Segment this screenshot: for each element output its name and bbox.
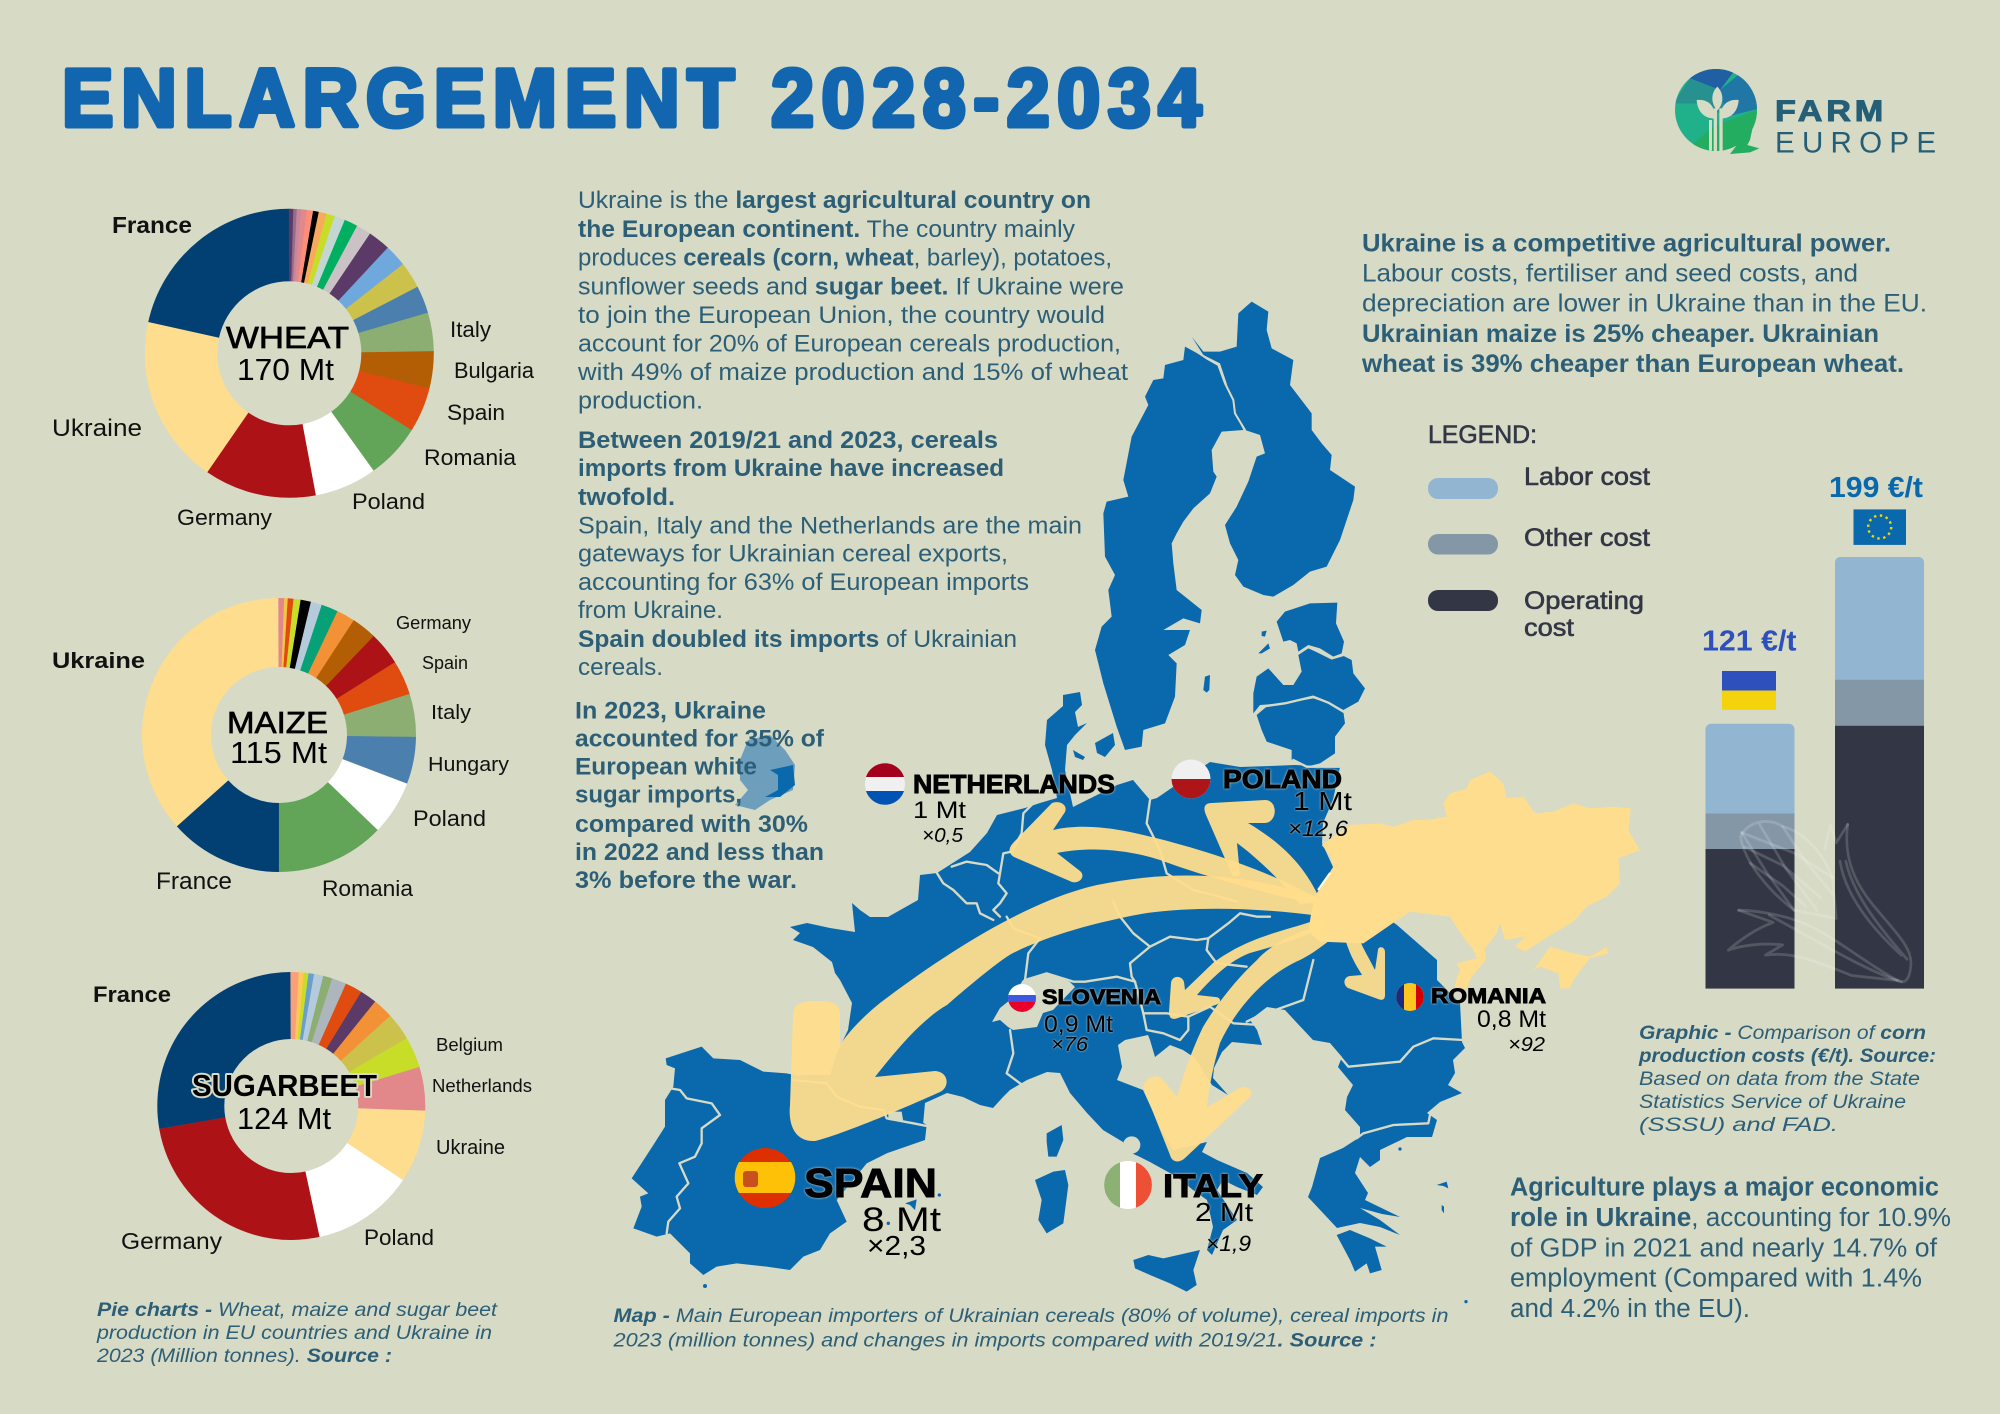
map: Iberia bbox=[632, 1047, 1068, 1288]
wheat country labels: Bulgaria bbox=[454, 358, 535, 383]
sugarbeet center label: 124 Mt bbox=[237, 1101, 331, 1136]
legend: operating cost: cost bbox=[1524, 614, 1574, 642]
text: economic role paragraph: role in Ukraine, accounting for 10.9% bbox=[1510, 1204, 1951, 1232]
arrow: to Romania bbox=[1344, 942, 1385, 1000]
text: imports paragraph: twofold. bbox=[578, 484, 675, 511]
label: Romania: 0,8 Mt bbox=[1477, 1006, 1546, 1033]
map: Ukraine bbox=[1308, 772, 1640, 992]
label: Slovenia: 0,9 Mt bbox=[1044, 1011, 1113, 1038]
arrow: to Slovenia bbox=[1169, 918, 1328, 1019]
text: competitive power paragraph: wheat is 39% cheaper than European wheat. bbox=[1361, 350, 1904, 378]
text: intro paragraph: the European continent. The country mainly bbox=[578, 216, 1075, 243]
title: ENLARGEMENT 2028-2034 bbox=[62, 52, 1201, 144]
text: imports paragraph: Spain doubled its imports of Ukrainian bbox=[578, 626, 1017, 653]
maize country labels: Hungary bbox=[428, 754, 509, 776]
label: Romania bbox=[1396, 983, 1546, 1056]
legend: LEGEND: bbox=[1428, 421, 1537, 449]
caption: pie charts bbox=[96, 1300, 498, 1367]
text: sugar paragraph: In 2023, Ukraine bbox=[575, 698, 766, 724]
label: Poland: POLAND bbox=[1223, 764, 1342, 794]
value: Ukraine: 121 €/t bbox=[1702, 626, 1797, 658]
flag: Netherlands bbox=[865, 763, 905, 805]
text: economic role paragraph bbox=[1510, 1174, 1951, 1323]
maize country labels: Spain bbox=[422, 653, 468, 673]
text: sugar paragraph: accounted for 35% of bbox=[575, 726, 825, 752]
sugarbeet country labels: Belgium bbox=[436, 1035, 503, 1055]
maize country labels: France bbox=[156, 868, 232, 895]
map: internal borders bbox=[937, 800, 1270, 1087]
legend: other cost: Other cost bbox=[1524, 524, 1650, 552]
label: Romania: ×92 bbox=[1508, 1034, 1545, 1056]
text: sugar paragraph: 3% before the war. bbox=[575, 867, 797, 894]
text: imports paragraph: accounting for 63% of European imports bbox=[578, 569, 1029, 596]
sugarbeet country labels: Ukraine bbox=[436, 1137, 505, 1159]
arrow: to Netherlands bbox=[1010, 802, 1320, 905]
maize country labels: Poland bbox=[413, 806, 486, 831]
label: Italy bbox=[1104, 1161, 1263, 1256]
text: intro paragraph: Ukraine is the largest agricultural country on bbox=[578, 187, 1091, 214]
wheat country labels: Spain bbox=[447, 400, 505, 425]
map: mainland EU bbox=[790, 692, 1465, 1255]
flag: Romania bbox=[1396, 983, 1424, 1011]
flag: Poland bbox=[1172, 760, 1210, 798]
text: economic role paragraph: employment (Compared with 1.4% bbox=[1510, 1264, 1922, 1292]
legend: labor cost: Labor cost bbox=[1524, 463, 1650, 491]
sugarbeet country labels: Germany bbox=[121, 1228, 223, 1254]
label: Netherlands bbox=[865, 763, 1115, 847]
label: Slovenia bbox=[1008, 984, 1161, 1056]
caption: graphic: (SSSU) and FAD. bbox=[1639, 1115, 1838, 1136]
label: Spain: SPAIN bbox=[804, 1160, 937, 1206]
label: Spain: 8 Mt bbox=[862, 1201, 942, 1239]
label: Poland bbox=[1172, 760, 1353, 841]
text: economic role paragraph: of GDP in 2021 and nearly 14.7% of bbox=[1510, 1234, 1938, 1262]
label: Netherlands: NETHERLANDS bbox=[913, 769, 1115, 799]
label: Italy: 2 Mt bbox=[1195, 1197, 1254, 1227]
text: competitive power paragraph bbox=[1361, 230, 1927, 378]
label: Spain bbox=[735, 1148, 942, 1261]
sugarbeet center label bbox=[192, 1068, 377, 1136]
sugarbeet center label: SUGARBEET bbox=[192, 1068, 377, 1103]
label: Poland: 1 Mt bbox=[1293, 786, 1353, 816]
label: Netherlands: ×0,5 bbox=[922, 825, 964, 847]
maize country labels: Ukraine bbox=[52, 648, 145, 673]
map: Balearic islands, Corsica, Sardinia bbox=[703, 1125, 1068, 1288]
logo text: EUROPE bbox=[1775, 127, 1943, 160]
caption: pie charts: Pie charts - Wheat, maize and sugar beet bbox=[97, 1300, 498, 1321]
wheat country labels: France bbox=[112, 212, 192, 238]
map: Switzerland gap bbox=[992, 973, 1075, 1030]
map: Danish islands bbox=[1073, 733, 1115, 760]
label: Romania: ROMANIA bbox=[1431, 985, 1546, 1008]
map: Sweden, Finland, Baltics bbox=[1095, 302, 1365, 767]
text: competitive power paragraph: depreciation are lower in Ukraine than in the EU. bbox=[1362, 290, 1927, 318]
bar: Ukraine bbox=[1706, 724, 1794, 989]
caption: map: 2023 (million tonnes) and changes in imports compared with 2019/21 . Source : bbox=[612, 1330, 1376, 1352]
arrow: to Poland bbox=[1204, 800, 1320, 905]
arrows from Ukraine bbox=[790, 800, 1385, 1161]
text: intro paragraph: production. bbox=[578, 388, 703, 414]
chart: sugarbeet segments bbox=[191, 1006, 392, 1206]
text: economic role paragraph: and 4.2% in the EU). bbox=[1510, 1295, 1750, 1323]
sugarbeet country labels: Netherlands bbox=[432, 1076, 532, 1096]
text: sugar paragraph: compared with 30% bbox=[575, 811, 808, 838]
maize center label bbox=[227, 705, 328, 770]
caption: map: Map - Main European importers of Ukrainian cereals (80% of volume), cereal imports in bbox=[614, 1306, 1448, 1327]
label: Slovenia: SLOVENIA bbox=[1042, 986, 1161, 1009]
text: competitive power paragraph: Ukrainian maize is 25% cheaper. Ukrainian bbox=[1362, 320, 1879, 348]
panel: wheat donut chart bbox=[52, 212, 535, 530]
logo: Farm Europe bbox=[1675, 69, 1935, 154]
caption: graphic: Graphic - Comparison of corn bbox=[1639, 1023, 1926, 1044]
text: sugar paragraph: in 2022 and less than bbox=[575, 839, 824, 866]
text: intro paragraph: account for 20% of European cereals production, bbox=[578, 330, 1121, 358]
flag: Spain bbox=[735, 1148, 795, 1208]
maize center label: 115 Mt bbox=[230, 735, 327, 770]
text: intro paragraph: produces cereals (corn, wheat, barley), potatoes, bbox=[578, 244, 1112, 272]
sugarbeet country labels bbox=[93, 982, 532, 1254]
text: sugar paragraph bbox=[575, 698, 825, 894]
chart: wheat segments bbox=[181, 245, 398, 462]
text: intro paragraph: sunflower seeds and sugar beet. If Ukraine were bbox=[578, 274, 1124, 300]
label: Slovenia: ×76 bbox=[1051, 1034, 1089, 1056]
flag: EU bbox=[1854, 509, 1906, 545]
caption: graphic bbox=[1638, 1023, 1936, 1136]
map: Sicily, Peloponnese, islands bbox=[1123, 1136, 1468, 1303]
label: Italy: ITALY bbox=[1163, 1168, 1263, 1204]
text: economic role paragraph: Agriculture plays a major economic bbox=[1510, 1174, 1939, 1202]
icon: plant bbox=[1697, 87, 1739, 152]
wheat country labels: Ukraine bbox=[52, 415, 142, 442]
label: Netherlands: 1 Mt bbox=[913, 797, 966, 824]
logo text: FARM bbox=[1775, 95, 1887, 128]
maize country labels bbox=[52, 613, 509, 901]
icon: corn outline bbox=[1728, 821, 1911, 982]
wheat center label: WHEAT bbox=[226, 320, 349, 355]
label: Spain: ×2,3 bbox=[867, 1230, 926, 1261]
text: competitive power paragraph: Labour costs, fertiliser and seed costs, and bbox=[1362, 260, 1858, 288]
arrow: to Italy bbox=[1143, 925, 1330, 1161]
wheat country labels: Italy bbox=[450, 317, 491, 342]
flag: Italy bbox=[1104, 1161, 1152, 1209]
panel: maize donut chart bbox=[52, 613, 509, 901]
wheat center label bbox=[226, 320, 349, 387]
legend: labor cost bbox=[1428, 463, 1650, 499]
bar: EU bbox=[1835, 557, 1924, 989]
caption: pie charts: production in EU countries and Ukraine in bbox=[96, 1323, 492, 1344]
legend: operating cost bbox=[1428, 587, 1644, 642]
caption: pie charts: 2023 (Million tonnes). Source : bbox=[96, 1346, 392, 1367]
caption: graphic: Statistics Service of Ukraine bbox=[1639, 1092, 1906, 1113]
legend bbox=[1428, 421, 1650, 642]
wheat country labels bbox=[52, 212, 535, 530]
wheat country labels: Germany bbox=[177, 505, 272, 530]
label: Poland: ×12,6 bbox=[1288, 816, 1349, 841]
text: sugar paragraph: European white bbox=[575, 754, 757, 780]
legend: other cost bbox=[1428, 524, 1650, 554]
text: imports paragraph: Between 2019/21 and 2023, cereals bbox=[578, 427, 998, 454]
flag: Slovenia bbox=[1008, 984, 1036, 1012]
map: Poland-Ukraine border highlight bbox=[1318, 873, 1330, 890]
caption: graphic: Based on data from the State bbox=[1639, 1069, 1920, 1090]
wheat country labels: Poland bbox=[352, 489, 425, 514]
text: imports paragraph: from Ukraine. bbox=[578, 597, 723, 624]
arrow: to Spain bbox=[790, 876, 1320, 1141]
chart: maize segments bbox=[176, 632, 382, 838]
text: intro paragraph: to join the European Union, the country would bbox=[578, 302, 1105, 329]
sugarbeet country labels: France bbox=[93, 982, 171, 1007]
maize country labels: Germany bbox=[396, 613, 471, 633]
text: imports paragraph: cereals. bbox=[578, 654, 663, 681]
text: imports paragraph: Spain, Italy and the Netherlands are the main bbox=[578, 512, 1082, 540]
bar chart: corn production costs bbox=[1702, 472, 1924, 989]
text: imports paragraph: gateways for Ukrainian cereal exports, bbox=[578, 540, 1008, 568]
maize center label: MAIZE bbox=[227, 705, 328, 740]
maize country labels: Romania bbox=[322, 876, 414, 901]
caption: graphic: production costs (€/t). Source: bbox=[1638, 1046, 1936, 1067]
text: competitive power paragraph: Ukraine is a competitive agricultural power. bbox=[1362, 230, 1891, 258]
map of Europe bbox=[632, 302, 1640, 1303]
text: imports paragraph bbox=[578, 427, 1082, 681]
text: intro paragraph bbox=[577, 187, 1128, 414]
panel: sugarbeet donut chart bbox=[93, 982, 532, 1254]
caption: map bbox=[612, 1306, 1448, 1352]
wheat center label: 170 Mt bbox=[237, 352, 334, 387]
legend: operating cost: Operating bbox=[1524, 587, 1644, 615]
value: EU: 199 €/t bbox=[1829, 472, 1923, 504]
maize country labels: Italy bbox=[431, 702, 471, 724]
sugarbeet country labels: Poland bbox=[364, 1225, 434, 1250]
text: imports paragraph: imports from Ukraine have increased bbox=[578, 455, 1004, 482]
map: Ireland faded bbox=[735, 735, 795, 810]
text: intro paragraph: with 49% of maize production and 15% of wheat bbox=[577, 359, 1128, 386]
flag: Ukraine bbox=[1722, 671, 1776, 710]
wheat country labels: Romania bbox=[424, 445, 517, 470]
label: Italy: ×1,9 bbox=[1206, 1231, 1251, 1256]
text: sugar paragraph: sugar imports, bbox=[575, 782, 742, 808]
logo text bbox=[1775, 95, 1943, 160]
